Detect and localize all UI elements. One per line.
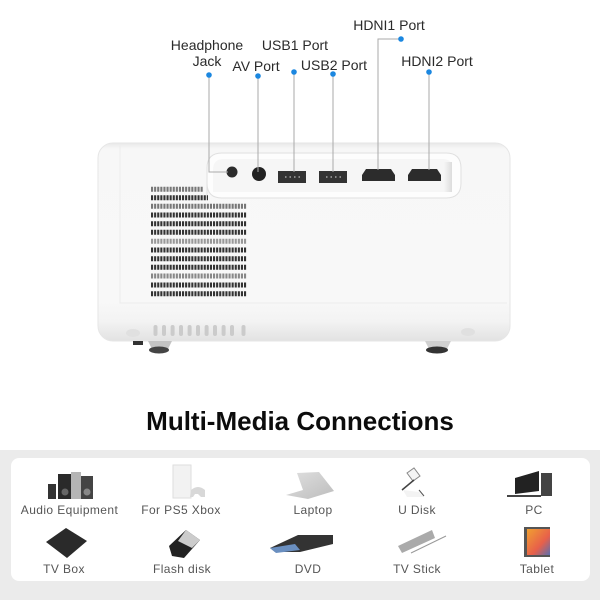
device: tablet — [520, 527, 554, 576]
device: audio equipment: Audio Equipment — [21, 503, 118, 517]
device: DVD: DVD — [295, 562, 321, 576]
port: headphone jack — [226, 166, 238, 178]
callout: headphone jack: Jack — [193, 53, 222, 69]
callout: USB1 port — [262, 37, 328, 172]
port: AV — [252, 167, 266, 181]
device: laptop: Laptop — [293, 503, 333, 517]
callout: HDMI2 port — [401, 53, 473, 170]
device: TV box: TV Box — [43, 562, 85, 576]
port: HDMI1 — [362, 169, 395, 181]
feet — [133, 341, 451, 354]
device: U disk: U Disk — [398, 503, 436, 517]
device: flash disk — [153, 530, 212, 576]
bottom band — [0, 450, 600, 600]
device: TV stick: TV Stick — [393, 562, 442, 576]
callout: USB1 port: USB1 Port — [262, 37, 328, 53]
callout: USB2 port — [301, 57, 367, 172]
screw recess right — [461, 328, 475, 336]
port panel — [207, 153, 461, 198]
device: PC: PC — [525, 503, 543, 517]
device: U disk — [398, 468, 436, 517]
device: console — [141, 465, 221, 517]
callout: HDMI2 port: HDNI2 Port — [401, 53, 473, 69]
device: TV stick — [393, 530, 446, 576]
callout: HDMI1 port: HDNI1 Port — [353, 17, 425, 33]
screw recess left — [126, 329, 140, 337]
device: PC — [507, 471, 552, 517]
callout: AV port: AV Port — [232, 58, 280, 74]
device: tablet: Tablet — [520, 562, 554, 576]
device card — [11, 458, 590, 581]
callout: headphone jack: Headphone — [171, 37, 243, 53]
projector body — [98, 143, 510, 354]
port: HDMI2 — [408, 169, 441, 181]
title: Multi-Media Connections — [146, 406, 454, 436]
callout: AV port — [232, 58, 280, 172]
callout: USB2 port: USB2 Port — [301, 57, 367, 73]
bottom vent slots — [156, 327, 244, 334]
device: DVD — [270, 535, 333, 576]
device: flash disk: Flash disk — [153, 562, 212, 576]
port: USB2 — [319, 171, 347, 183]
device: console: For PS5 Xbox — [141, 503, 221, 517]
port: USB1 — [278, 171, 306, 183]
callout: HDMI1 port — [353, 17, 425, 170]
device: TV box — [43, 528, 87, 576]
vent grille — [151, 189, 247, 294]
device: laptop — [286, 472, 334, 517]
callout: headphone jack — [171, 37, 243, 172]
device: audio equipment — [21, 472, 118, 517]
